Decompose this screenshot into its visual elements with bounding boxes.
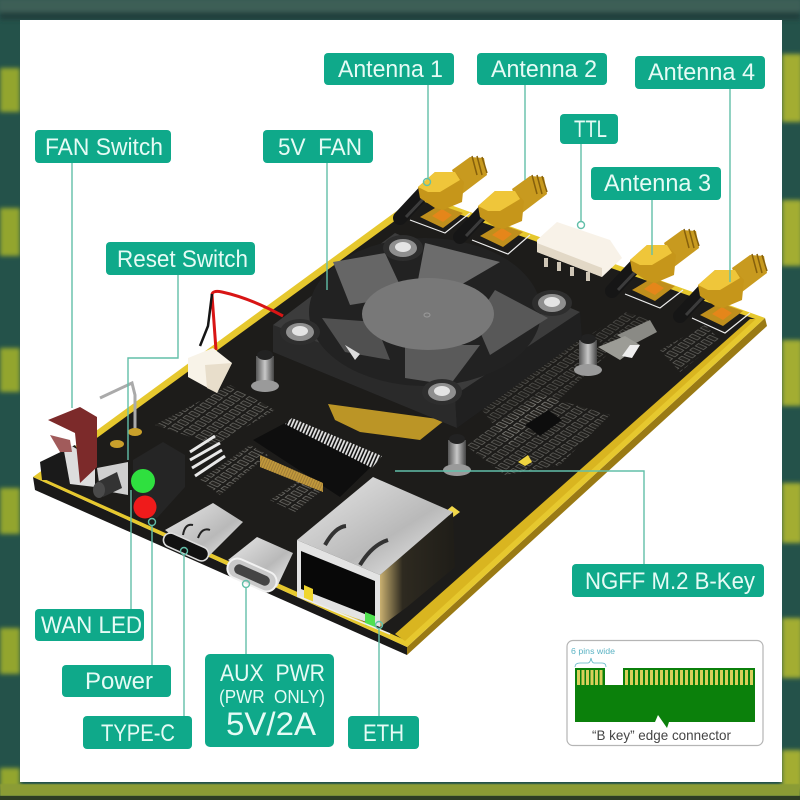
label: 5V FAN xyxy=(263,130,373,163)
label: Antenna 2: Antenna 2 xyxy=(491,56,597,83)
label: WAN LED: WAN LED xyxy=(41,612,142,639)
circuit board xyxy=(33,156,767,655)
LED housing xyxy=(133,442,185,518)
green WAN LED xyxy=(131,469,155,493)
label: Antenna 3 xyxy=(591,167,721,200)
red power LED xyxy=(134,496,156,518)
leader endpoints xyxy=(148,178,584,628)
board: silkscreen component clusters xyxy=(155,312,720,518)
label: AUX PWR 5V/2A: 5V/2A xyxy=(226,706,317,742)
gold thermal pad xyxy=(328,404,445,440)
5V fan xyxy=(273,233,582,428)
label: Power: Power xyxy=(85,668,153,695)
label: Reset Switch: Reset Switch xyxy=(117,246,248,273)
label: AUX PWR 5V/2A: (PWR ONLY) xyxy=(219,687,325,707)
fan switch xyxy=(40,383,142,490)
label: TYPE-C xyxy=(83,716,192,749)
label: FAN Switch: FAN Switch xyxy=(45,134,163,161)
USB type-C port xyxy=(161,503,243,563)
board: side edge and gold rim xyxy=(33,194,767,655)
label: Antenna 4: Antenna 4 xyxy=(648,59,755,86)
label: Antenna 3: Antenna 3 xyxy=(604,170,711,197)
label: Antenna 1: Antenna 1 xyxy=(338,56,443,83)
label: ETH: ETH xyxy=(363,720,404,747)
SMA antenna connectors xyxy=(400,156,767,333)
label: 5V FAN: 5V FAN xyxy=(278,134,362,161)
label: ETH xyxy=(348,716,419,749)
fan wires and connector xyxy=(188,291,283,393)
label: TYPE-C: TYPE-C xyxy=(101,720,175,747)
inset: pin width annotation: 6 pins wide xyxy=(571,646,615,656)
Ethernet jack xyxy=(297,477,455,634)
inset: green edge connector xyxy=(575,668,755,728)
M.2 B-Key connector xyxy=(253,418,382,497)
TTL connector xyxy=(537,222,622,281)
label: Antenna 4 xyxy=(635,56,765,89)
leader lines xyxy=(72,85,730,716)
label: AUX PWR 5V/2A xyxy=(205,654,334,747)
pin header silkscreen xyxy=(190,436,225,476)
inset: B key edge connector xyxy=(567,640,763,746)
label: TTL xyxy=(560,114,618,144)
label: AUX PWR 5V/2A: AUX PWR xyxy=(220,660,325,687)
label: Power xyxy=(62,665,171,697)
AUX PWR type-C port xyxy=(224,537,293,595)
inset: caption: “B key” edge connector xyxy=(592,727,731,743)
label: TTL: TTL xyxy=(574,116,607,143)
label: NGFF M.2 B-Key: NGFF M.2 B-Key xyxy=(585,568,755,595)
fan standoffs xyxy=(251,334,602,476)
reset button xyxy=(93,462,128,498)
inset: pin width annotation xyxy=(571,646,615,667)
